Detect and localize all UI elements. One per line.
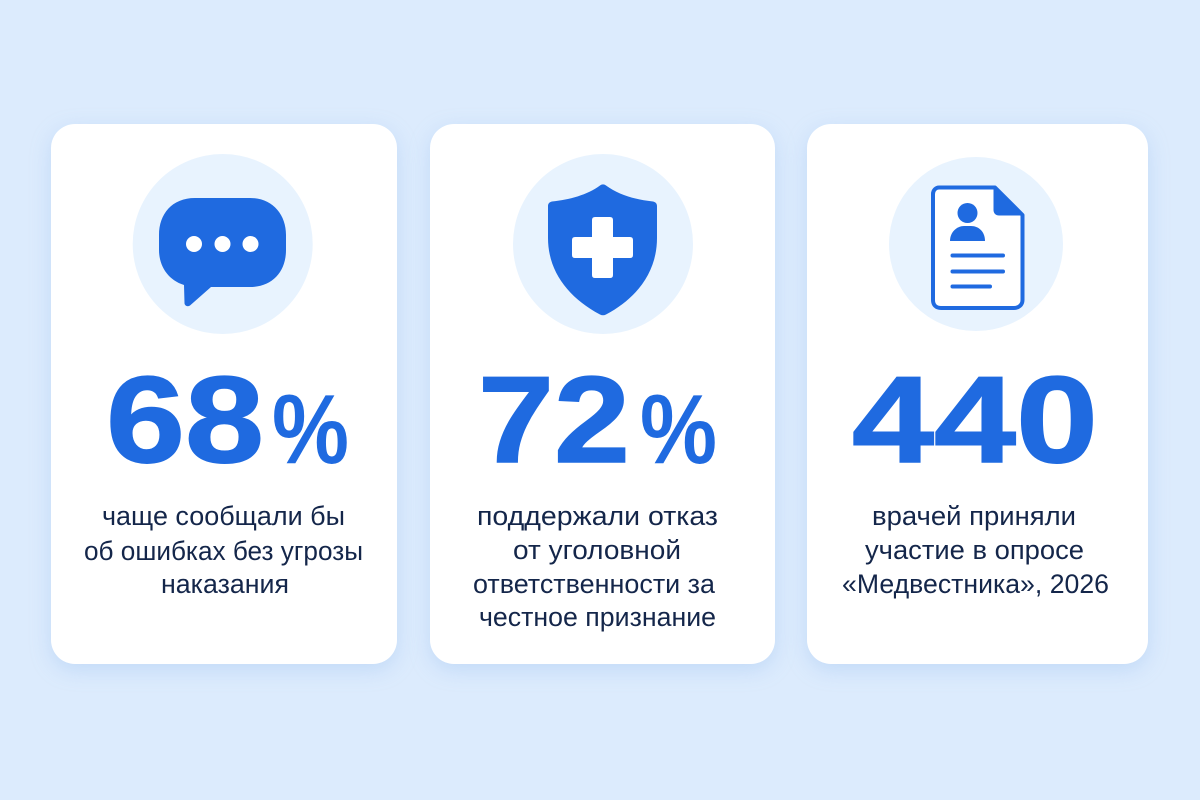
icon: chat bubble [133, 154, 313, 334]
icon: shield with cross [513, 154, 693, 334]
stat: 68%: % [272, 374, 349, 484]
description: card 3 [842, 501, 1109, 599]
description: card 1: об ошибках без угрозы [84, 536, 363, 566]
description: card 1 [84, 501, 363, 599]
stat: 72% [478, 352, 717, 489]
icon: document with person [889, 157, 1063, 331]
description: card 3: врачей приняли [872, 501, 1076, 531]
card 2 background [430, 124, 775, 664]
panel: card 3 [807, 124, 1148, 664]
description: card 2: честное признание [479, 602, 716, 632]
description: card 1: чаще сообщали бы [102, 501, 345, 531]
description: card 2: поддержали отказ [477, 501, 718, 531]
card 1 background [51, 124, 397, 664]
description: card 3: участие в опросе [865, 535, 1084, 565]
stat: 68%: 68 [106, 352, 264, 489]
description: card 1: наказания [161, 569, 289, 599]
panel: card 1 [51, 124, 397, 664]
description: card 2: ответственности за [473, 569, 715, 599]
stat: 440: 440 [852, 352, 1098, 489]
stat: 72%: 72 [478, 352, 630, 489]
panel: card 2 [430, 124, 775, 664]
stat: 68% [106, 352, 349, 489]
stat: 72%: % [640, 374, 717, 484]
description: card 2 [473, 501, 718, 632]
description: card 3: «Медвестника», 2026 [842, 569, 1109, 599]
description: card 2: от уголовной [513, 535, 681, 565]
card 3 background [807, 124, 1148, 664]
